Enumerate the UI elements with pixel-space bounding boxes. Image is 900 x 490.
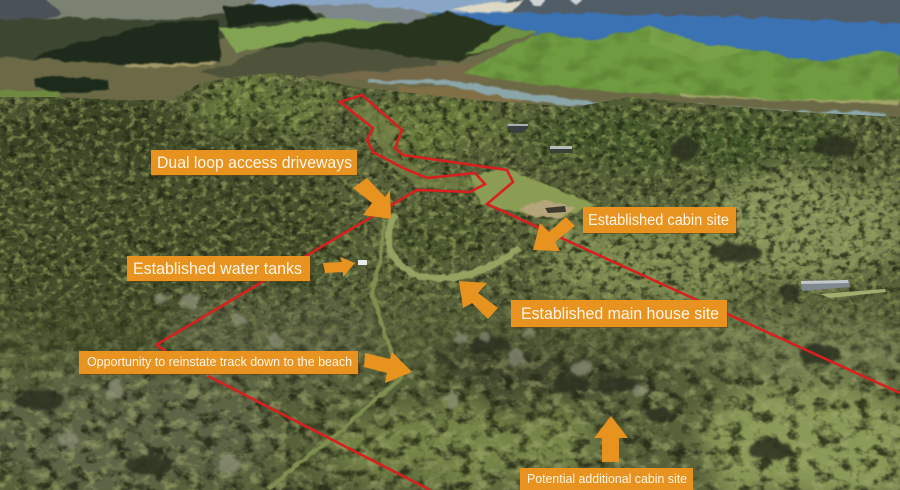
label: established cabin site: Established cabin site <box>588 212 729 229</box>
label: dual loop access driveways: Dual loop access driveways <box>157 154 352 172</box>
label: opportunity to reinstate track <box>79 351 359 375</box>
green paddock <box>218 18 396 54</box>
water tanks <box>358 260 367 265</box>
property boundary line <box>156 95 900 490</box>
label: established water tanks: Established water tanks <box>133 260 302 278</box>
background landscape: distant hills and harbour <box>0 0 900 130</box>
arrow: driveways <box>353 178 391 219</box>
label: opportunity to reinstate track: Opportunity to reinstate track down to the beach <box>87 355 352 369</box>
dark bush on top of hill <box>224 5 318 27</box>
label: potential additional cabin site: Potential additional cabin site <box>527 472 687 486</box>
pale flowering canopy <box>62 292 646 475</box>
arrow: additional cabin site <box>594 416 628 462</box>
driveway loop <box>388 215 520 278</box>
green mountain <box>464 24 900 106</box>
label: potential additional cabin site <box>520 468 693 490</box>
arrow: track to beach <box>364 352 412 383</box>
label: established main house site: Established main house site <box>521 304 719 323</box>
harbour water <box>430 13 900 66</box>
driveway strip <box>352 104 478 190</box>
river <box>367 80 888 118</box>
canopy texture <box>0 73 900 371</box>
arrow: water tanks <box>323 257 355 277</box>
buildings <box>358 124 886 298</box>
label: established main house site <box>511 300 728 328</box>
forested ridge <box>258 13 540 62</box>
dark tree clumps <box>18 135 857 475</box>
ranges behind forest <box>0 14 330 64</box>
label: dual loop access driveways <box>151 150 358 176</box>
arrow: cabin site <box>533 217 575 251</box>
forest hill <box>32 20 220 65</box>
label: established cabin site <box>583 207 737 234</box>
label: established water tanks <box>127 256 311 282</box>
arrow: main house site <box>459 281 498 319</box>
main house knoll <box>392 202 488 262</box>
scrub hill <box>200 42 436 82</box>
vehicle track down to the beach <box>268 222 402 490</box>
tidal flats <box>0 58 900 130</box>
clearing and cabin platform <box>470 168 596 218</box>
flats by the river <box>400 86 560 106</box>
sand dune <box>452 1 525 13</box>
